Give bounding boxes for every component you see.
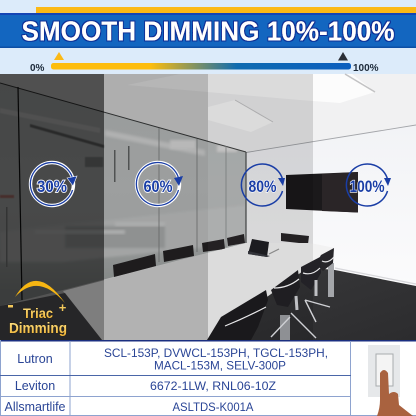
- dimming label: Dimming: [9, 321, 67, 337]
- triac dimming badge: [8, 281, 67, 337]
- label: 100%: 100%: [353, 63, 379, 74]
- table leg: [328, 263, 334, 297]
- dial: 100%: 100%: [350, 177, 384, 196]
- minus sign: [8, 305, 13, 308]
- gradient bar: [51, 63, 351, 70]
- brand: Lutron: Lutron: [17, 352, 53, 366]
- brightness band: 80%: [208, 74, 313, 340]
- room photo: [0, 74, 416, 340]
- front chairs: [207, 248, 334, 340]
- ceiling light panel 1: [127, 74, 375, 103]
- wall plate: [368, 345, 400, 397]
- hand: [377, 370, 413, 416]
- arc icon: [15, 281, 65, 303]
- title banner: [0, 13, 416, 48]
- label: 0%: 0%: [30, 63, 45, 74]
- brightness band: 30%: [0, 74, 104, 340]
- marker: low: [54, 52, 64, 60]
- ceiling: [0, 74, 416, 154]
- phone: [248, 239, 279, 257]
- brand: Leviton: Leviton: [15, 379, 55, 393]
- glass partition: [0, 83, 246, 306]
- dial: 60%: 60%: [144, 177, 172, 196]
- dial: 80%: [241, 164, 285, 206]
- dial: 30%: [30, 162, 77, 206]
- compatibility table: [0, 340, 416, 416]
- back chairs: [113, 233, 309, 277]
- plus sign: +: [59, 300, 67, 315]
- dial: 80%: 80%: [248, 177, 276, 196]
- Lutron models: SCL-153P, DVWCL-153PH, TGCL-153PH,: [104, 346, 328, 360]
- dial: 100%: [346, 164, 391, 206]
- header background: [0, 0, 416, 74]
- conference table: [63, 243, 335, 340]
- dimmer switch photo: [368, 345, 413, 416]
- dark left chair: [0, 293, 102, 340]
- marker: high: [338, 52, 348, 60]
- switch rocker: [376, 354, 393, 386]
- TV screen: [286, 172, 358, 212]
- chair post: [280, 315, 290, 340]
- right wall: [246, 125, 416, 287]
- dimming scale: [30, 52, 379, 74]
- brand: Allsmartlife: Allsmartlife: [4, 400, 66, 414]
- yellow accent stripe: [36, 7, 416, 13]
- Allsmartlife models: ASLTDS-K001A: [172, 400, 254, 414]
- dial: 30%: 30%: [37, 177, 67, 196]
- title: SMOOTH DIMMING 10%-100%: [22, 16, 394, 46]
- ceiling light panel 2: [208, 100, 273, 132]
- brightness band: 60%: [104, 74, 208, 340]
- triac label: Triac: [23, 305, 53, 321]
- floor: [195, 262, 416, 340]
- dial: 60%: [136, 162, 183, 206]
- Leviton models: 6672-1LW, RNL06-10Z: [150, 379, 276, 393]
- Lutron models: MACL-153M, SELV-300P: [154, 358, 286, 372]
- Lutron models: [104, 346, 328, 372]
